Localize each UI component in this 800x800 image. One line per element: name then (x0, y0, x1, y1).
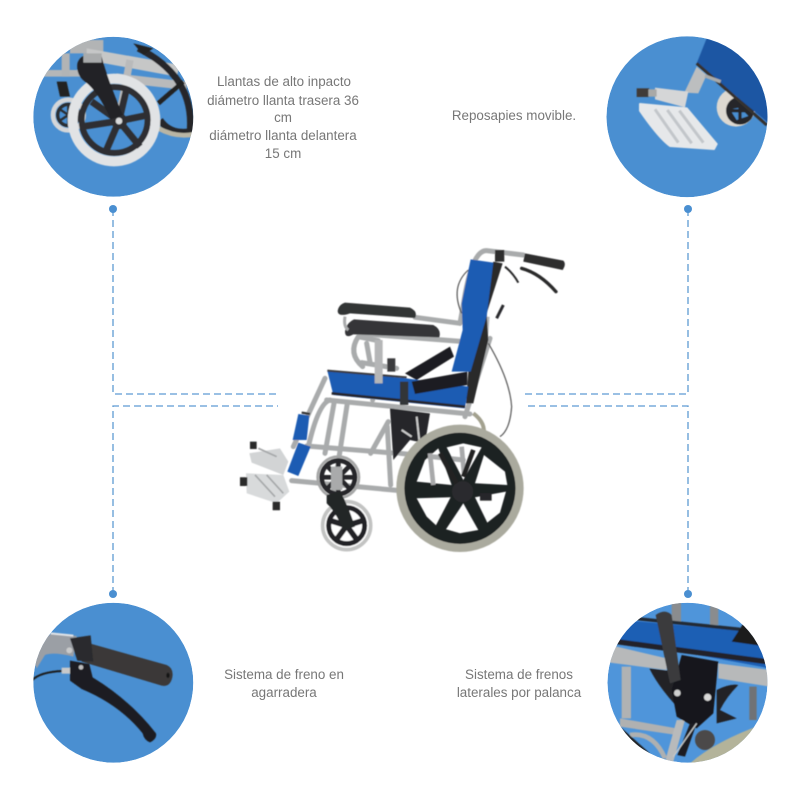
text: wheels description: diámetro llanta trasera 36 (207, 93, 359, 108)
connector dot: bottom left (109, 590, 117, 598)
text: hand brake description (224, 667, 344, 700)
text: wheels description: diámetro llanta delantera (209, 128, 357, 143)
text: side brake description: Sistema de frenos (465, 667, 573, 682)
text: wheels description: cm (274, 110, 292, 125)
main wheelchair image (240, 250, 565, 550)
small rear caster (318, 457, 359, 498)
frame tubes (292, 251, 523, 491)
connector dot: bottom right (684, 590, 692, 598)
handle bar (523, 253, 565, 270)
front caster (323, 502, 371, 550)
panel: hand brake detail circle (32, 603, 193, 763)
panel: side brake lever detail circle (608, 602, 770, 767)
armrests (338, 303, 416, 318)
text: hand brake description: Sistema de freno en (224, 667, 344, 682)
text: footrest description: Reposapies movible. (452, 108, 576, 123)
rear wheel (400, 413, 520, 548)
leg support (293, 414, 309, 440)
text: side brake description: laterales por palanca (457, 685, 582, 700)
footrests (249, 448, 288, 475)
connector dot: top left (109, 205, 117, 213)
panel: footrest detail circle (606, 36, 777, 197)
text: side brake description (457, 667, 582, 700)
text: wheels description (207, 74, 359, 161)
seat (327, 371, 468, 408)
connector dot: top right (684, 205, 692, 213)
text: hand brake description: agarradera (251, 685, 317, 700)
text: wheels description: 15 cm (265, 146, 301, 161)
backrest (466, 262, 503, 403)
panel: wheel detail circle (33, 37, 195, 197)
cables (457, 270, 468, 313)
seat belt (405, 347, 454, 380)
text: wheels description: Llantas de alto inpacto (217, 74, 351, 89)
